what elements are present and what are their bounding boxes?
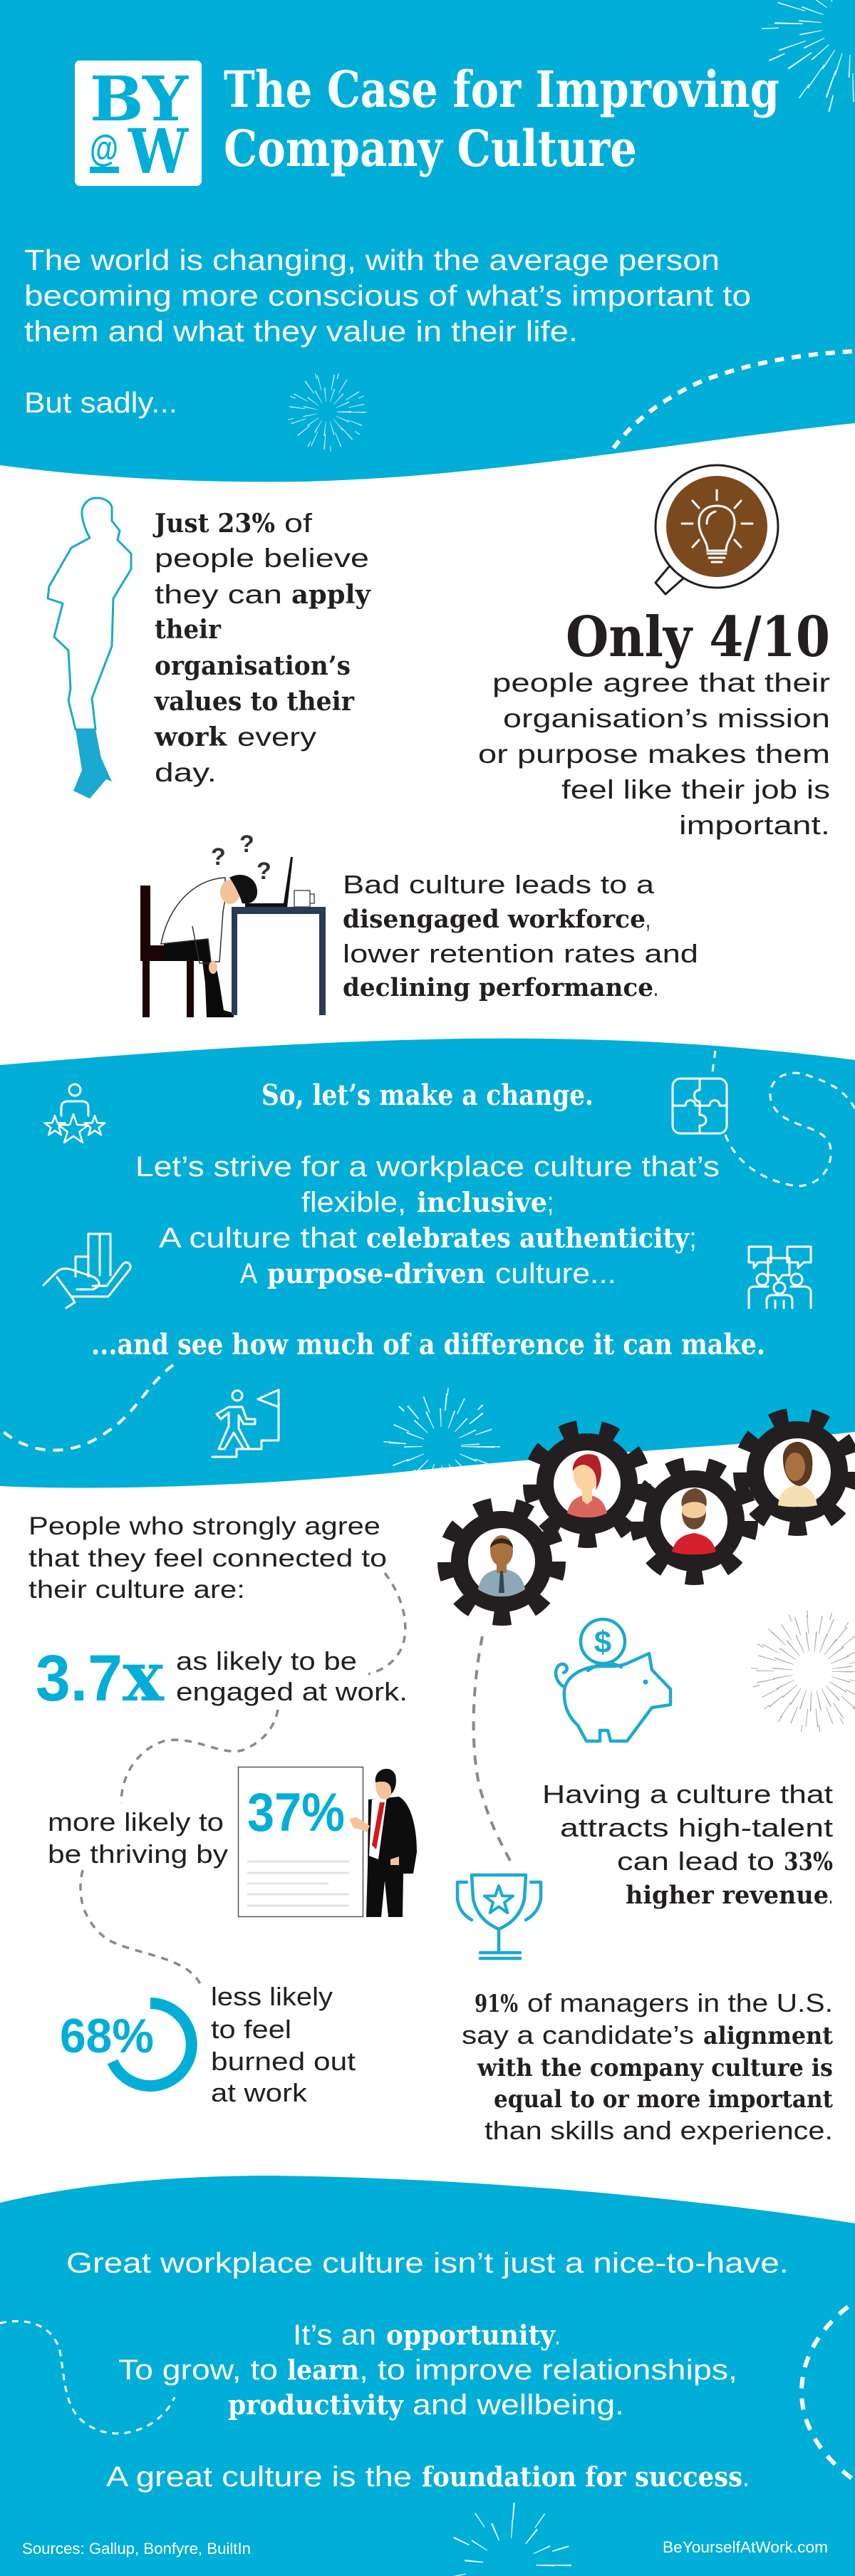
text: just 23 percent: of [284, 509, 313, 538]
panel: conclusion [0, 2248, 855, 2576]
gear: man with suit [445, 1505, 558, 1618]
text: bad culture: . [653, 972, 658, 1002]
text: see how much of a difference: ...and see how much of a difference it can make. [91, 1328, 765, 1361]
text: opportunity: It’s an [293, 2320, 376, 2351]
text: less likely: less likely [211, 1982, 333, 2011]
text: bad culture: declining performance [343, 973, 653, 1002]
burst: small center [290, 375, 364, 449]
dashed path: lower left [0, 1365, 173, 1450]
text: 91 percent of managers: say a candidate’s [462, 2020, 694, 2050]
text: 91 percent of managers: than skills and experience. [484, 2116, 833, 2145]
text: less likely: to feel [211, 2015, 291, 2044]
statistic: 68 percent with ring: 68% [60, 2009, 154, 2063]
text: foundation for success: . [742, 2461, 750, 2493]
icon: puzzle [673, 1079, 727, 1133]
illustration: tired worker at desk: ? [211, 843, 226, 871]
text: people who strongly agree: People who strongly agree [28, 1512, 380, 1540]
chart board: 37 percent: 37% [247, 1782, 345, 1843]
dashed connectors [81, 1573, 405, 1987]
text: just 23 percent: day. [155, 758, 217, 787]
text: just 23 percent: work [154, 722, 227, 752]
statistic: 3.7x: engaged at work. [176, 1677, 408, 1706]
panel: engagement statistics [28, 1512, 417, 2107]
header logo [75, 61, 202, 188]
statistic: 68 percent with ring [60, 2003, 192, 2086]
text: opportunity: , to improve relationships, [359, 2354, 737, 2386]
text: just 23 percent [152, 509, 371, 787]
text: 91 percent of managers: equal to or more important [494, 2085, 833, 2114]
illustration: tired worker at desk: ? [256, 858, 271, 885]
white panel: problem statistics background [0, 423, 855, 1065]
icon: trophy [457, 1875, 541, 1958]
text: only 4 of 10 description: important. [679, 811, 830, 840]
text: having a culture: attracts high-talent [560, 1813, 833, 1842]
panel: let's make a change [0, 1051, 855, 1457]
icon: lightbulb magnifier [656, 465, 778, 594]
text: more likely: be thriving by [48, 1839, 228, 1869]
statistic: 3.7x: x [123, 1636, 165, 1717]
text: only 4 of 10 heading: Only 4/10 [566, 605, 830, 670]
text: sources: Sources: Gallup, Bonfyre, BuiltIn [22, 2540, 251, 2557]
text: 91 percent of managers: 91% [475, 1990, 518, 2018]
gear: woman with red hair [531, 1428, 643, 1540]
statistic: 3.7x [36, 1636, 408, 1717]
text: just 23 percent: every [237, 722, 317, 752]
icon: hand holding chart [43, 1234, 130, 1308]
text: website: BeYourselfAtWork.com [663, 2538, 828, 2556]
burst: bottom [456, 2511, 563, 2576]
text: opportunity: and wellbeing. [413, 2389, 624, 2421]
text: opportunity: . [555, 2320, 560, 2351]
intro text: The world is changing, with the average person [24, 244, 720, 276]
text: strive for a culture: purpose-driven [267, 1257, 485, 1289]
text: bad culture: Bad culture leads to a [343, 870, 655, 899]
text: people who strongly agree [28, 1512, 387, 1604]
text: people who strongly agree: that they feel connected to [28, 1544, 387, 1572]
text: foundation for success: foundation for success [422, 2461, 742, 2493]
dashed path: top right [613, 351, 855, 448]
text: bad culture: disengaged workforce [343, 905, 646, 934]
dashed path: bottom right [802, 2307, 855, 2481]
intro text: But sadly... [24, 386, 177, 419]
text: more likely [48, 1807, 228, 1869]
text: having a culture: Having a culture that [542, 1780, 833, 1809]
text: only 4 of 10 description: or purpose makes them [478, 739, 830, 769]
text: strive for a culture: Let’s strive for a workplace culture that’s [135, 1151, 720, 1183]
text: foundation for success: A great culture is the [106, 2461, 412, 2493]
icon: climber on stairs [212, 1390, 279, 1457]
icon: woman outline [48, 498, 131, 799]
icon: team discussion [749, 1247, 811, 1308]
text: 91 percent of managers: with the company culture is [477, 2054, 833, 2082]
intro text [24, 244, 751, 419]
text: strive for a culture: A culture that [159, 1222, 357, 1254]
text: having a culture: . [829, 1880, 833, 1909]
gear: woman with dark hair [741, 1416, 854, 1528]
gears illustration [445, 1416, 854, 1618]
text: people who strongly agree: their culture are: [28, 1576, 245, 1604]
text: having a culture: can lead to [617, 1847, 774, 1876]
text: strive for a culture: ; [689, 1222, 697, 1254]
dashed connector: gears to trophy [474, 1636, 512, 1865]
text: having a culture: higher revenue [626, 1881, 829, 1910]
text: bad culture [343, 870, 698, 1002]
white panel: culture benefits background [0, 1432, 855, 2223]
text: more likely: more likely to [48, 1807, 224, 1837]
text: less likely: burned out [211, 2047, 356, 2076]
text: opportunity [118, 2319, 737, 2421]
text: bad culture: , [646, 904, 651, 933]
chart board: 37 percent [238, 1767, 363, 1916]
panel: bad culture [140, 831, 698, 1017]
text: less likely: at work [211, 2078, 308, 2107]
text: just 23 percent: their [155, 615, 222, 645]
panel: 23 percent statistic [48, 498, 371, 799]
text: only 4 of 10 description [478, 668, 830, 840]
text: only 4 of 10 description: people agree that their [492, 668, 830, 697]
decorative burst behind lower wave [387, 1391, 497, 1501]
text: opportunity: productivity [228, 2389, 404, 2421]
text: only 4 of 10 description: feel like their job is [561, 775, 830, 804]
statistic: 3.7x: as likely to be [176, 1646, 357, 1676]
illustration: businessman [349, 1769, 417, 1917]
text: having a culture [542, 1780, 833, 1910]
text: strive for a culture: inclusive [417, 1186, 547, 1218]
text: opportunity: learn [287, 2354, 359, 2386]
heading: so let's make a change: So, let’s make a change. [261, 1079, 594, 1112]
text: strive for a culture: ; [547, 1187, 554, 1218]
icon: piggy bank: $ [594, 1625, 611, 1660]
icon: person with stars [45, 1084, 105, 1143]
text: just 23 percent: organisation’s [155, 651, 351, 681]
text: having a culture: 33% [784, 1847, 833, 1876]
text: only 4 of 10 description: organisation’s mission [503, 704, 830, 733]
text: 91 percent of managers: alignment [703, 2022, 833, 2050]
text: just 23 percent: apply [291, 580, 371, 610]
text: opportunity: To grow, to [118, 2354, 278, 2386]
header logo: @ [90, 128, 118, 170]
illustration: tired worker at desk [140, 831, 326, 1017]
header logo: W [128, 116, 189, 188]
text: strive for a culture [135, 1151, 720, 1289]
burst: gray [755, 1614, 855, 1729]
burst: top right [770, 0, 855, 106]
text: strive for a culture: A [240, 1258, 257, 1289]
text: bad culture: lower retention rates and [343, 939, 698, 968]
illustration: tired worker at desk: ? [239, 831, 254, 858]
text: just 23 percent: Just 23% [152, 509, 275, 539]
intro text: becoming more conscious of what’s important to [24, 279, 751, 312]
header logo: BY [90, 63, 190, 135]
text: less likely [211, 1982, 356, 2107]
panel: revenue and hiring [457, 1614, 855, 2145]
text: just 23 percent: people believe [155, 544, 369, 573]
text: just 23 percent: values to their [154, 687, 355, 717]
statistic: 3.7x: 3.7 [36, 1642, 123, 1715]
text: opportunity: opportunity [386, 2319, 556, 2351]
icon: piggy bank [556, 1619, 670, 1741]
title: Company Culture [224, 119, 637, 178]
text: just 23 percent: they can [155, 580, 282, 609]
title [224, 60, 779, 178]
text: 91 percent of managers [462, 1988, 833, 2145]
text: strive for a culture: flexible, [301, 1187, 406, 1218]
text: strive for a culture: celebrates authenticity [366, 1222, 690, 1254]
dashed path: bottom left [0, 2321, 175, 2434]
text: foundation for success [106, 2461, 750, 2493]
gear: man with beard [638, 1465, 750, 1577]
text: nice to have: Great workplace culture isn’t just a nice-to-have. [66, 2248, 789, 2279]
text: strive for a culture: culture... [495, 1258, 616, 1289]
dashed paths: right side [712, 1051, 855, 1186]
panel: 4 of 10 statistic [478, 465, 830, 840]
intro text: them and what they value in their life. [24, 315, 578, 348]
text: 91 percent of managers: of managers in the U.S. [527, 1988, 833, 2017]
